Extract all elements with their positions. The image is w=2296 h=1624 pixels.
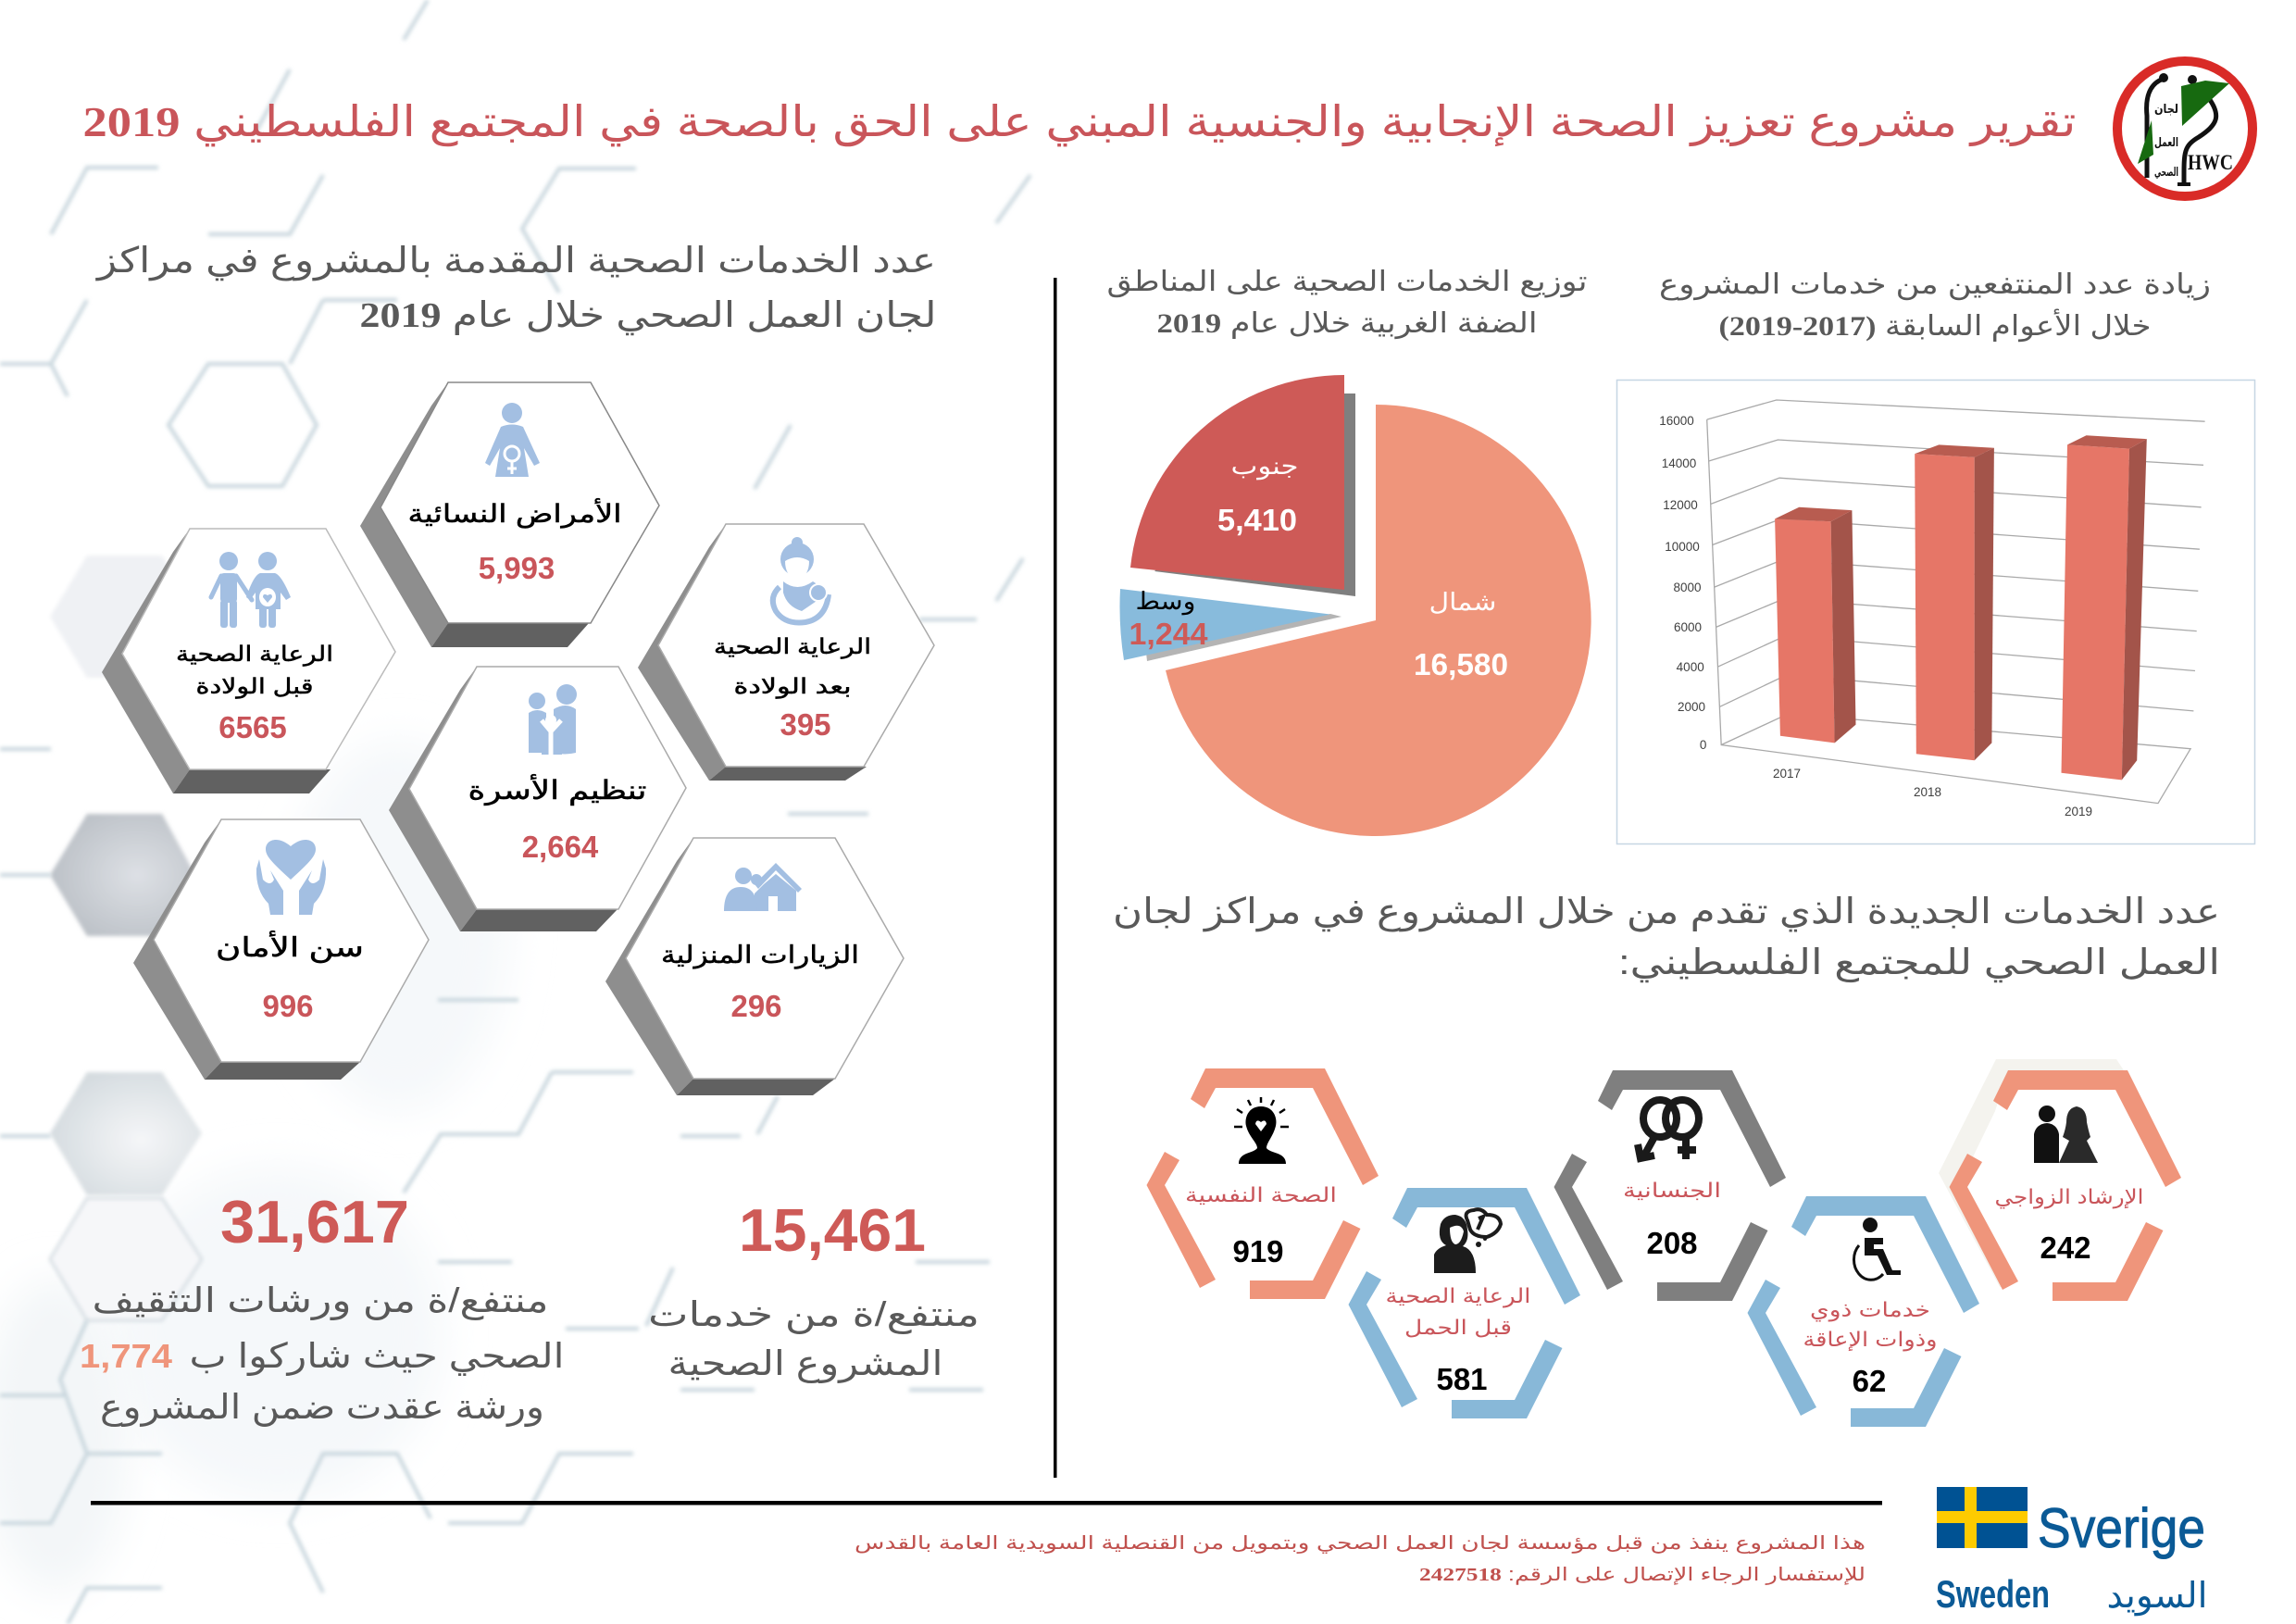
axis labels: 6000 — [1674, 620, 1702, 634]
hexagon: marital counseling: 242 — [2040, 1230, 2091, 1265]
stat: workshop beneficiaries: 1,774 — [80, 1337, 172, 1375]
slice: north: 16,580 — [1414, 647, 1508, 681]
icon: woman — [485, 403, 540, 477]
logo: Sverige: Sweden — [1936, 1572, 2050, 1616]
logo: Health Work Committees: لجان — [2154, 102, 2178, 116]
icon: heart in hands — [256, 840, 326, 915]
footer text — [855, 1533, 1866, 1585]
logo: Sverige: السويد — [2107, 1577, 2207, 1617]
icon: house with people — [724, 863, 802, 911]
hexagon: disability services: وذوات الإعاقة — [1803, 1328, 1937, 1351]
bar: 2017 — [1775, 507, 1855, 743]
footer text: هذا المشروع ينفذ من قبل مؤسسة لجان العمل الصحي وبتمويل من القنصلية السويدية العامة بالقدس — [855, 1533, 1866, 1555]
stat: service beneficiaries: منتفع/ة من خدمات — [648, 1295, 980, 1334]
panel: hexagon services — [102, 382, 934, 1095]
heading: new services — [1113, 893, 2220, 983]
hexagon: sexuality — [1554, 1070, 1786, 1301]
hexagon: family planning: تنظيم الأسرة — [468, 773, 646, 806]
icon: family — [529, 684, 577, 755]
icon: Swedish flag — [1937, 1487, 2028, 1548]
hexagon: postnatal care: بعد الولادة — [733, 674, 852, 699]
hexagon: gynecology: الأمراض النسائية — [407, 497, 622, 529]
slice: center: وسط — [1135, 587, 1196, 616]
axis labels: 2019 — [2065, 805, 2092, 818]
axis labels: 14000 — [1662, 456, 1696, 470]
vertical divider — [1054, 278, 1057, 1478]
hexagon: postnatal care: 395 — [780, 707, 831, 742]
axis labels: 2018 — [1914, 785, 1941, 799]
hexagon: prenatal care: الرعاية الصحية — [176, 642, 333, 667]
heading: pie chart — [1107, 267, 1587, 339]
hexagon: home visits: الزيارات المنزلية — [661, 941, 859, 969]
bar chart — [1616, 380, 2255, 844]
icon: head with heart — [1234, 1097, 1289, 1164]
stat: service beneficiaries — [648, 1196, 980, 1383]
stat: service beneficiaries: المشروع الصحية — [668, 1344, 942, 1383]
hexagon: postnatal care: الرعاية الصحية — [714, 634, 871, 659]
logo: Sverige — [1936, 1487, 2207, 1617]
heading: bar chart — [1659, 269, 2211, 342]
slice: north: شمال — [1429, 588, 1496, 616]
hexagon: sexuality: 208 — [1646, 1226, 1698, 1260]
heading: health services count: لجان العمل الصحي خلال عام 2019 — [359, 296, 937, 335]
hexagon: pre-pregnancy care: 581 — [1436, 1362, 1488, 1396]
heading: new services: عدد الخدمات الجديدة الذي تقدم من خلال المشروع في مراكز لجان — [1113, 893, 2220, 932]
hexagon: disability services: 62 — [1853, 1364, 1886, 1398]
axis labels: 4000 — [1677, 660, 1704, 674]
footer text: للإستفسار الرجاء الإتصال على الرقم: 2427518 — [1419, 1565, 1866, 1585]
stat: workshop beneficiaries — [80, 1188, 565, 1427]
logo: Health Work Committees — [2117, 61, 2252, 196]
axis labels: 2000 — [1678, 700, 1705, 714]
hexagon: sexuality: الجنسانية — [1623, 1179, 1721, 1202]
slice: center — [1120, 587, 1341, 661]
stat: service beneficiaries: 15,461 — [739, 1196, 926, 1264]
bar: 2019 — [2061, 435, 2147, 780]
bar: 2018 — [1915, 444, 1994, 760]
heading: pie chart: الضفة الغربية خلال عام 2019 — [1157, 308, 1537, 339]
heading: health services count — [95, 242, 936, 335]
slice: south — [1130, 375, 1355, 596]
logo: Health Work Committees: الصحي — [2154, 165, 2178, 179]
icon: gender symbols — [1638, 1100, 1699, 1159]
pie chart — [1120, 375, 1591, 836]
axis labels: 10000 — [1665, 540, 1700, 554]
hexagon: gynecology: 5,993 — [479, 551, 555, 585]
icon: couple — [211, 552, 291, 628]
hexagon: menopause — [133, 819, 429, 1080]
hexagon: home visits: 296 — [730, 989, 782, 1023]
hexagon: mental health — [1146, 1068, 1379, 1299]
stat: workshop beneficiaries: الصحي حيث شاركوا ب — [189, 1337, 565, 1376]
hexagon: prenatal care — [102, 529, 395, 793]
hexagon: family planning — [389, 667, 686, 931]
slice: south: جنوب — [1231, 452, 1298, 481]
hexagon: menopause: سن الأمان — [216, 930, 364, 963]
hexagon: marital counseling: الإرشاد الزواجي — [1994, 1185, 2144, 1209]
hexagon: postnatal care — [638, 524, 934, 781]
icon: couple silhouette — [2034, 1106, 2098, 1163]
hexagon: prenatal care: قبل الولادة — [196, 674, 313, 699]
icon: mother and baby — [773, 537, 829, 622]
slice: south: 5,410 — [1217, 503, 1297, 537]
background: pale hexagon pattern — [0, 0, 1030, 1624]
icon: wheelchair — [1853, 1218, 1901, 1280]
heading: bar chart: خلال الأعوام السابقة (2017-2019) — [1719, 307, 2152, 342]
hexagon: prenatal care: 6565 — [218, 710, 287, 744]
axis labels: 12000 — [1663, 498, 1698, 512]
hexagon: family planning: 2,664 — [522, 830, 599, 864]
hexagon: mental health: الصحة النفسية — [1185, 1183, 1337, 1206]
panel: new services hexagons — [1146, 1059, 2181, 1427]
hexagon: mental health: 919 — [1232, 1234, 1284, 1268]
logo: Sverige: Sverige — [2038, 1497, 2205, 1559]
footer rule — [91, 1501, 1882, 1505]
axis labels — [1659, 414, 2092, 818]
hexagon: gynecology — [360, 382, 659, 647]
icon: woman thinking — [1434, 1209, 1501, 1273]
slice: north — [1166, 405, 1591, 836]
axis labels: 16000 — [1659, 414, 1694, 428]
axis labels: 8000 — [1673, 581, 1702, 594]
heading: bar chart: زيادة عدد المنتفعين من خدمات المشروع — [1659, 269, 2211, 301]
title: تقرير مشروع تعزيز الصحة الإنجابية والجنسية المبني على الحق بالصحة في المجتمع الفلسطيني 2019 — [83, 97, 2077, 147]
hexagon: marital counseling — [1939, 1059, 2181, 1301]
hexagon: menopause: 996 — [262, 989, 314, 1023]
heading: new services: العمل الصحي للمجتمع الفلسطيني: — [1618, 943, 2220, 983]
logo: Health Work Committees: العمل — [2154, 135, 2178, 149]
stat: workshop beneficiaries: 31,617 — [220, 1188, 409, 1255]
hexagon: pre-pregnancy care — [1348, 1188, 1580, 1418]
axis labels: 2017 — [1773, 767, 1801, 781]
axis labels: 0 — [1700, 738, 1706, 752]
hexagon: pre-pregnancy care: الرعاية الصحية — [1385, 1284, 1531, 1307]
stat: workshop beneficiaries: ورشة عقدت ضمن المشروع — [100, 1388, 544, 1427]
hexagon: disability services: خدمات ذوي — [1810, 1298, 1930, 1321]
slice: center: 1,244 — [1129, 617, 1208, 651]
logo: Health Work Committees: HWC — [2188, 151, 2233, 174]
heading: pie chart: توزيع الخدمات الصحية على المناطق — [1107, 267, 1587, 298]
hexagon: home visits — [605, 838, 904, 1095]
heading: health services count: عدد الخدمات الصحية المقدمة بالمشروع في مراكز — [95, 242, 936, 281]
stat: workshop beneficiaries: منتفع/ة من ورشات التثقيف — [93, 1281, 548, 1320]
hexagon: disability services — [1748, 1196, 1979, 1427]
hexagon: pre-pregnancy care: قبل الحمل — [1404, 1316, 1512, 1339]
